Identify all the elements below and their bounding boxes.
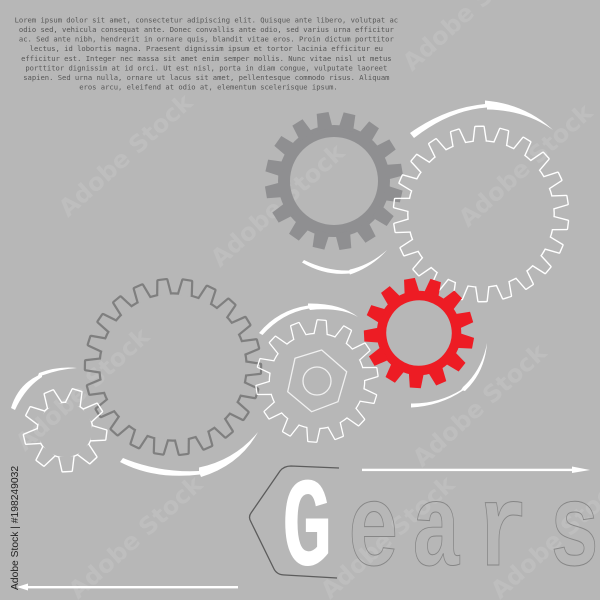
gear: white outline with hex nut [252,316,382,446]
stock id label: Adobe Stock | #198249032 [10,466,21,590]
arrow: straight right [362,466,590,473]
gear: solid grey [265,112,403,250]
arrow arc: below solid grey gear [302,250,387,274]
body text block: eros arcu, eleifend at odio at, elementum scelerisque ipsum. [79,83,338,92]
arrow arc: right of red gear [411,343,487,408]
title bracket [250,466,339,578]
body text block: lectus, id lobortis magna. Praesent dignissim ipsum et tortor lacinia efficitur eu [30,44,383,53]
title: Gears: e [348,466,399,600]
body text block: efficitur est. Integer nec massa sit amet enim semper mollis. Nunc vitae nisl ut metus [21,54,392,63]
title: Gears: s [549,466,600,600]
gear: red [355,269,483,397]
arrow arc: above small gear [11,368,77,410]
watermarks: Adobe Stock [10,322,156,456]
gear: small white outline [22,388,108,473]
gear: large grey outline [84,278,262,456]
watermarks: Adobe Stock [205,138,351,272]
title: Gears: r [477,466,528,600]
body text block: sapien. Sed urna nulla, ornare ut lacus sit amet, pellentesque commodo risus. Aliquam [23,73,389,82]
watermarks: Adobe Stock [453,98,599,232]
body text block: Lorem ipsum dolor sit amet, consectetur adipiscing elit. Quisque ante libero, volutpat ac [15,16,398,24]
watermarks: Adobe Stock [53,88,199,222]
arrow arc: above large white gear [410,100,553,138]
title: Gears: a [411,466,462,600]
arrow arc: below large grey gear [120,432,258,477]
body text block: odio sed, vehicula consequat ante. Donec convallis ante odio, sed varius urna efficitur [19,25,394,34]
gear: large white outline [393,125,569,303]
body text block: porttitor dignissim at id orci. Ut est nisl, porta in diam congue, vulputate laoreet [25,63,387,72]
arrow arc: above hex gear [259,303,358,335]
title: Gears: G [282,460,332,600]
watermarks: Adobe Stock [407,338,553,472]
body text block: ac. Sed ante nibh, hendrerit in ornare quis, blandit vitae eros. Proin dictum porttitor [19,35,394,44]
title: Gears [282,460,600,600]
arrow: straight left [17,584,238,590]
